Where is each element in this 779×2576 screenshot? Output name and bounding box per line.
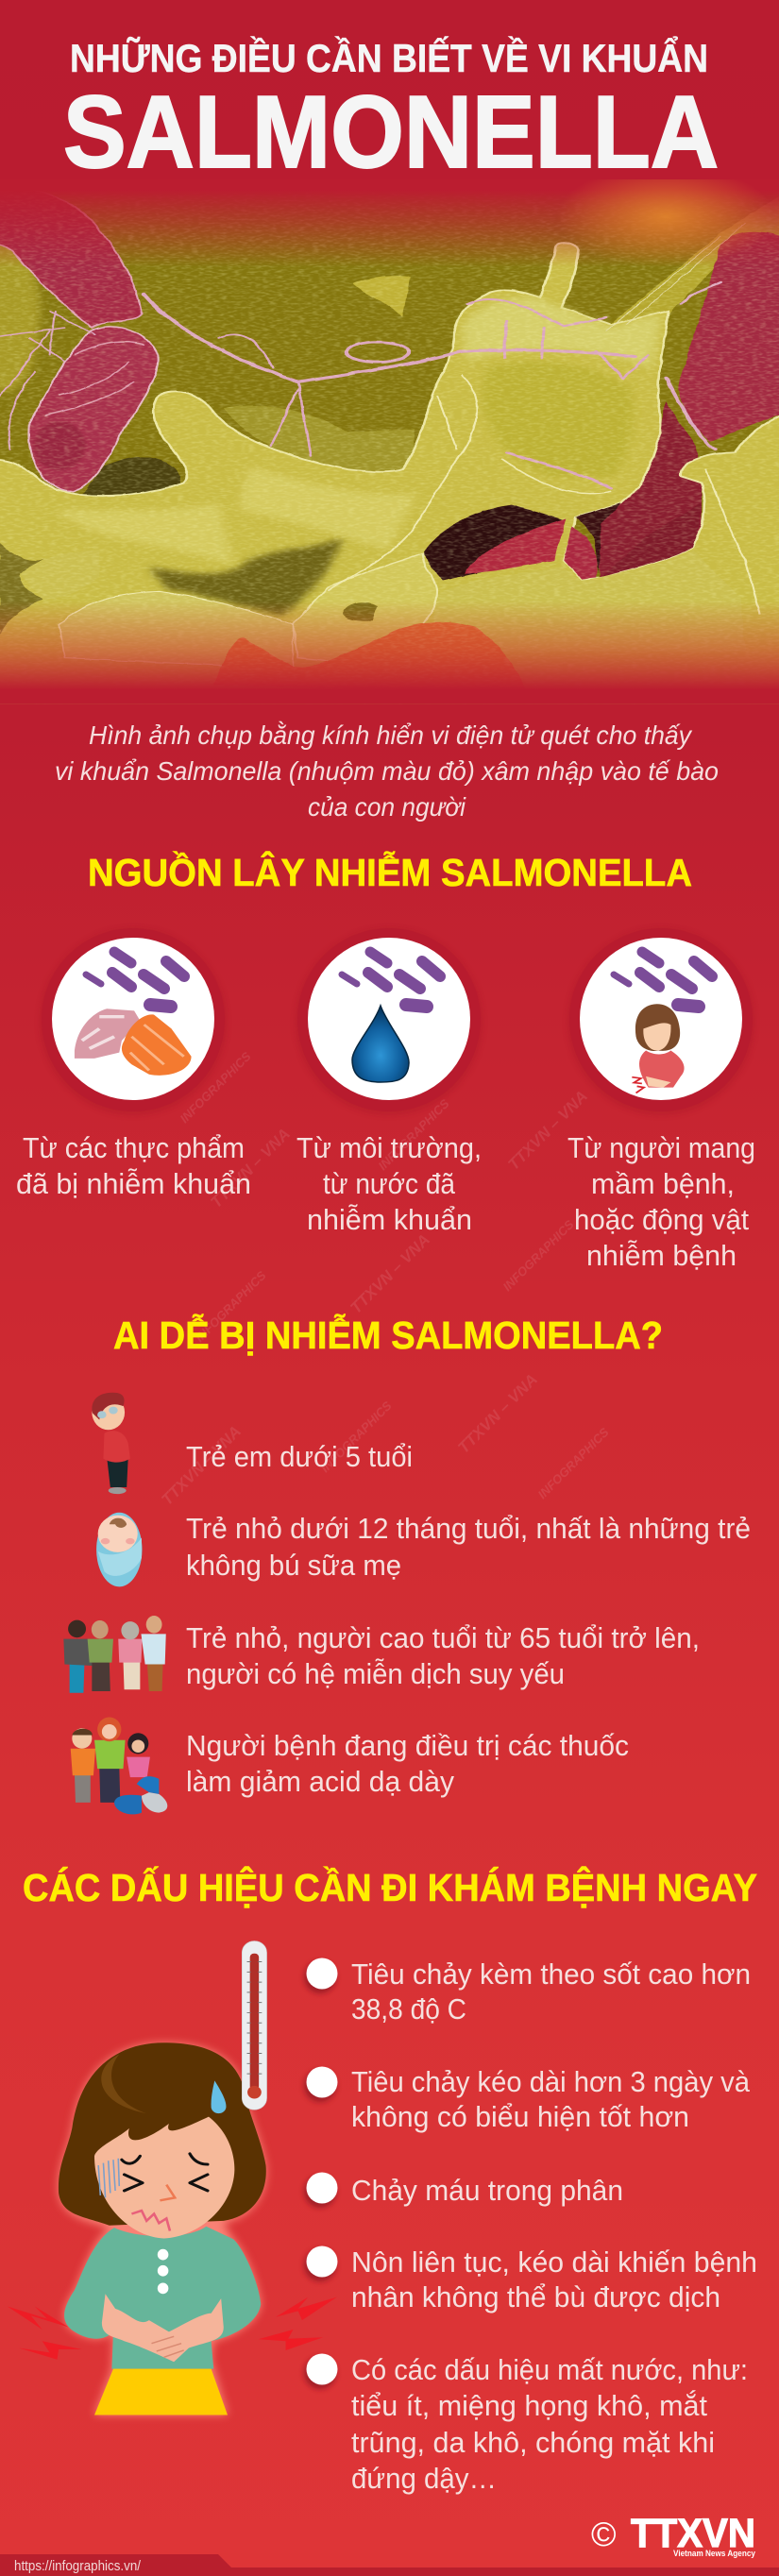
text: at-risk groups: không bú sữa mẹ — [186, 1549, 401, 1582]
icon: people and capsules — [71, 1718, 167, 1814]
text: warning signs: không có biểu hiện tốt hơn — [351, 2100, 689, 2133]
icon: meat and salmon — [75, 1008, 192, 1076]
watermarks: INFOGRAPHICS — [318, 1398, 395, 1475]
text: warning signs: Có các dấu hiệu mất nước, như: — [351, 2353, 748, 2386]
text: source labels: Từ các thực phẩm — [23, 1131, 245, 1164]
panel: source 3 sick person — [567, 928, 754, 1115]
text: warning signs: tiểu ít, miệng họng khô, mắt — [351, 2389, 707, 2422]
caption — [55, 720, 719, 822]
logo: TTXVN: © — [591, 2515, 617, 2553]
watermarks: INFOGRAPHICS — [500, 1217, 577, 1294]
icon: water drop — [352, 1006, 409, 1082]
caption: Hình ảnh chụp bằng kính hiển vi điện tử quét cho thấy — [89, 720, 693, 750]
text: at-risk groups: Trẻ em dưới 5 tuổi — [186, 1440, 413, 1473]
heading: sources: NGUỒN LÂY NHIỄM SALMONELLA — [88, 851, 692, 894]
watermarks: INFOGRAPHICS — [535, 1425, 612, 1501]
watermarks: INFOGRAPHICS — [193, 1268, 269, 1345]
text: at-risk groups: Người bệnh đang điều trị các thuốc — [186, 1729, 629, 1762]
bacterium left top — [0, 188, 142, 328]
text: warning signs: trũng, da khô, chóng mặt khi — [351, 2426, 715, 2459]
icon: pain bolts — [8, 2297, 337, 2360]
panel: source 2 water — [296, 928, 483, 1115]
icon: elderly group — [63, 1616, 166, 1693]
watermarks: TTXVN – VNA — [158, 1422, 245, 1509]
title: NHỮNG ĐIỀU CẦN BIẾT VỀ VI KHUẨN — [70, 35, 708, 80]
watermarks: TTXVN – VNA — [454, 1370, 541, 1457]
text: source labels: đã bị nhiễm khuẩn — [16, 1167, 251, 1200]
text: source labels: từ nước đã — [323, 1167, 456, 1200]
icon: bacteria — [342, 952, 440, 1007]
illustration: woman with stomach pain — [8, 2042, 337, 2415]
watermarks — [158, 1049, 612, 1509]
text: source labels: hoặc động vật — [574, 1203, 749, 1236]
caption: vi khuẩn Salmonella (nhuộm màu đỏ) xâm nhập vào tế bào — [55, 756, 719, 786]
text: source labels: nhiễm khuẩn — [307, 1203, 472, 1236]
icon: pain lines on face — [98, 2159, 119, 2197]
icon: sweat drop — [212, 2080, 226, 2113]
footer band — [0, 2554, 779, 2576]
icon: sick woman — [632, 1004, 685, 1093]
text: warning signs — [351, 1957, 757, 2495]
icon: boy — [92, 1393, 130, 1494]
photo: salmonella bacteria invading human cell — [0, 166, 779, 719]
heading: at-risk groups: AI DỄ BỊ NHIỄM SALMONELLA? — [113, 1313, 663, 1357]
text: warning signs: 38,8 độ C — [351, 1992, 466, 2025]
text: at-risk groups: làm giảm acid dạ dày — [186, 1765, 454, 1798]
icon: bacteria — [614, 952, 712, 1007]
text: at-risk groups: người có hệ miễn dịch suy yếu — [186, 1657, 565, 1690]
text: source labels: Từ môi trường, — [296, 1131, 482, 1164]
watermarks: INFOGRAPHICS — [178, 1049, 254, 1126]
cell ridges — [328, 375, 760, 615]
text: warning signs: Nôn liên tục, kéo dài khiến bệnh — [351, 2246, 757, 2279]
bacterium left front — [29, 327, 158, 491]
text: warning signs: Tiêu chảy kéo dài hơn 3 ngày và — [351, 2065, 751, 2098]
logo: TTXVN — [591, 2511, 755, 2558]
text: source labels: nhiễm bệnh — [586, 1239, 737, 1272]
text: warning signs: nhân không thể bù được dịch — [351, 2280, 720, 2313]
bullets — [304, 1958, 338, 2389]
text: at-risk groups — [186, 1440, 751, 1798]
panel: source 1 food — [40, 928, 227, 1115]
icon: swaddled baby — [96, 1513, 142, 1586]
text: warning signs: Chảy máu trong phân — [351, 2174, 623, 2207]
title: SALMONELLA — [63, 75, 719, 190]
text: warning signs: đứng dậy… — [351, 2462, 497, 2495]
title — [63, 35, 719, 190]
text: source labels: Từ người mang — [567, 1131, 755, 1164]
icon: bacteria — [86, 952, 184, 1007]
text: source labels — [16, 1131, 755, 1272]
caption: của con người — [308, 792, 466, 822]
flagella fibers — [0, 223, 745, 488]
watermarks: TTXVN – VNA — [504, 1087, 591, 1174]
watermarks: TTXVN – VNA — [207, 1125, 294, 1212]
watermarks: TTXVN – VNA — [347, 1230, 433, 1317]
logo: TTXVN: TTXVN — [631, 2511, 755, 2556]
text: at-risk groups: Trẻ nhỏ, người cao tuổi từ 65 tuổi trở lên, — [186, 1621, 700, 1654]
icon: thermometer — [242, 1941, 267, 2110]
text: source labels: mầm bệnh, — [591, 1167, 735, 1200]
text: warning signs: Tiêu chảy kèm theo sốt cao hơn — [351, 1957, 751, 1991]
text: at-risk groups: Trẻ nhỏ dưới 12 tháng tuổi, nhất là những trẻ — [186, 1512, 751, 1545]
watermarks: INFOGRAPHICS — [376, 1096, 452, 1173]
face features — [122, 2154, 208, 2191]
logo: TTXVN: Vietnam News Agency — [673, 2549, 755, 2558]
footer band: https://infographics.vn/ — [14, 2558, 142, 2574]
